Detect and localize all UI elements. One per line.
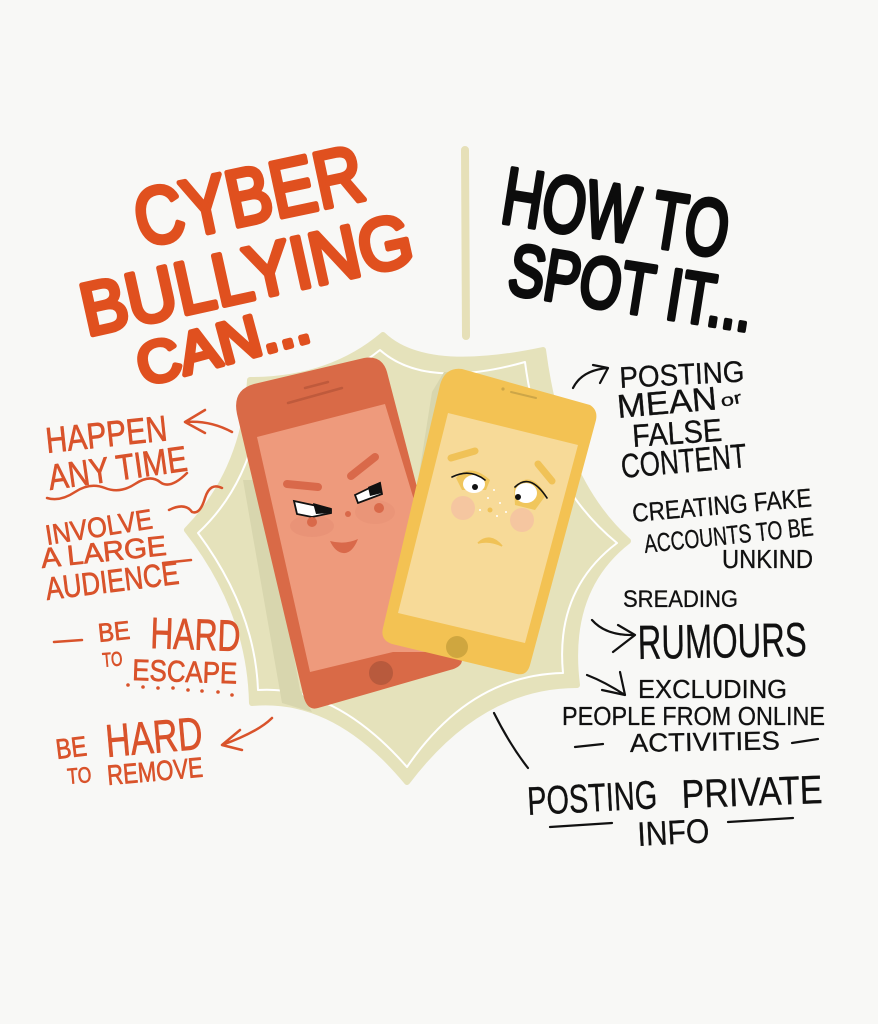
text: creating fake accounts: ACCOUNTS TO BE	[642, 511, 815, 559]
red phone face	[287, 457, 395, 553]
panel: how to spot it	[494, 355, 825, 854]
text: be hard to escape	[96, 609, 241, 691]
title: cyber bullying can	[72, 128, 420, 399]
text: posting private info: INFO	[636, 812, 710, 854]
text: involve a large audience	[39, 503, 191, 607]
text: be hard to remove: BE	[54, 730, 89, 765]
yellow phone home button	[446, 636, 468, 658]
red phone speaker	[288, 382, 342, 403]
arrow: to posting mean	[573, 365, 608, 388]
text: be hard to escape: TO	[102, 648, 123, 672]
starburst background	[187, 335, 628, 782]
dotted underline	[126, 683, 234, 697]
text: involve a large audience: A LARGE	[39, 530, 168, 574]
text: posting private info: POSTING	[526, 773, 658, 824]
icon: yellow phone	[382, 369, 596, 674]
text: posting mean or false content: FALSE	[631, 412, 723, 454]
text: posting mean or false content: CONTENT	[619, 437, 748, 486]
yellow phone screen	[398, 413, 578, 643]
text: happen any time	[44, 407, 190, 498]
yellow phone speaker	[511, 392, 536, 398]
red phone screen	[257, 404, 460, 672]
text: involve a large audience: INVOLVE	[43, 503, 155, 551]
text: be hard to remove: REMOVE	[106, 752, 204, 791]
title: cyber bullying can: BULLYING	[72, 197, 420, 352]
text: excluding people: PEOPLE FROM ONLINE	[562, 701, 825, 731]
text: excluding people: ACTIVITIES	[630, 725, 780, 758]
arrow: to happen any time	[185, 410, 232, 433]
text: be hard to remove: HARD	[103, 707, 205, 767]
text: posting mean or false content: POSTING	[619, 355, 745, 395]
text: creating fake accounts	[631, 482, 815, 574]
arrow: to rumours	[592, 620, 635, 652]
text: posting mean or false content: or	[719, 388, 744, 411]
title: how to spot it: HOW TO	[496, 151, 735, 274]
title: how to spot it: SPOT IT...	[503, 230, 759, 347]
dash	[54, 640, 82, 642]
text: creating fake accounts: CREATING FAKE	[631, 482, 813, 528]
title: cyber bullying can: CYBER	[126, 128, 371, 264]
arrow: to be hard to remove	[222, 718, 272, 750]
text: happen any time: ANY TIME	[45, 438, 190, 498]
text: excluding people: EXCLUDING	[638, 674, 787, 704]
yellow phone face	[451, 451, 552, 546]
text: be hard to escape: BE	[96, 615, 131, 648]
text: posting mean or false content: MEAN	[615, 379, 718, 425]
text: involve a large audience: AUDIENCE	[43, 555, 181, 607]
text: posting private info	[526, 768, 823, 854]
arrow: to excluding	[587, 672, 625, 695]
text: posting mean or false content	[615, 355, 748, 486]
text: be hard to remove	[54, 707, 205, 791]
wavy underline	[47, 473, 187, 499]
red phone home button	[369, 661, 393, 685]
text: posting private info: PRIVATE	[681, 768, 823, 817]
text: creating fake accounts: UNKIND	[722, 544, 813, 574]
icon: red phone	[236, 358, 462, 709]
squiggle	[169, 486, 222, 512]
title: cyber bullying can: CAN...	[130, 290, 316, 399]
panel: what cyberbullying can do	[39, 407, 272, 791]
text: happen any time: HAPPEN	[44, 407, 169, 461]
text: be hard to remove: TO	[66, 762, 92, 789]
text: be hard to escape: HARD	[150, 609, 241, 661]
text: excluding people	[562, 674, 825, 758]
line to posting private	[494, 713, 528, 768]
title: how to spot it	[496, 151, 759, 347]
text: spreading rumours: SREADING	[623, 586, 738, 613]
text: be hard to escape: ESCAPE	[132, 654, 238, 691]
text: spreading rumours	[623, 586, 807, 670]
divider	[465, 150, 466, 336]
